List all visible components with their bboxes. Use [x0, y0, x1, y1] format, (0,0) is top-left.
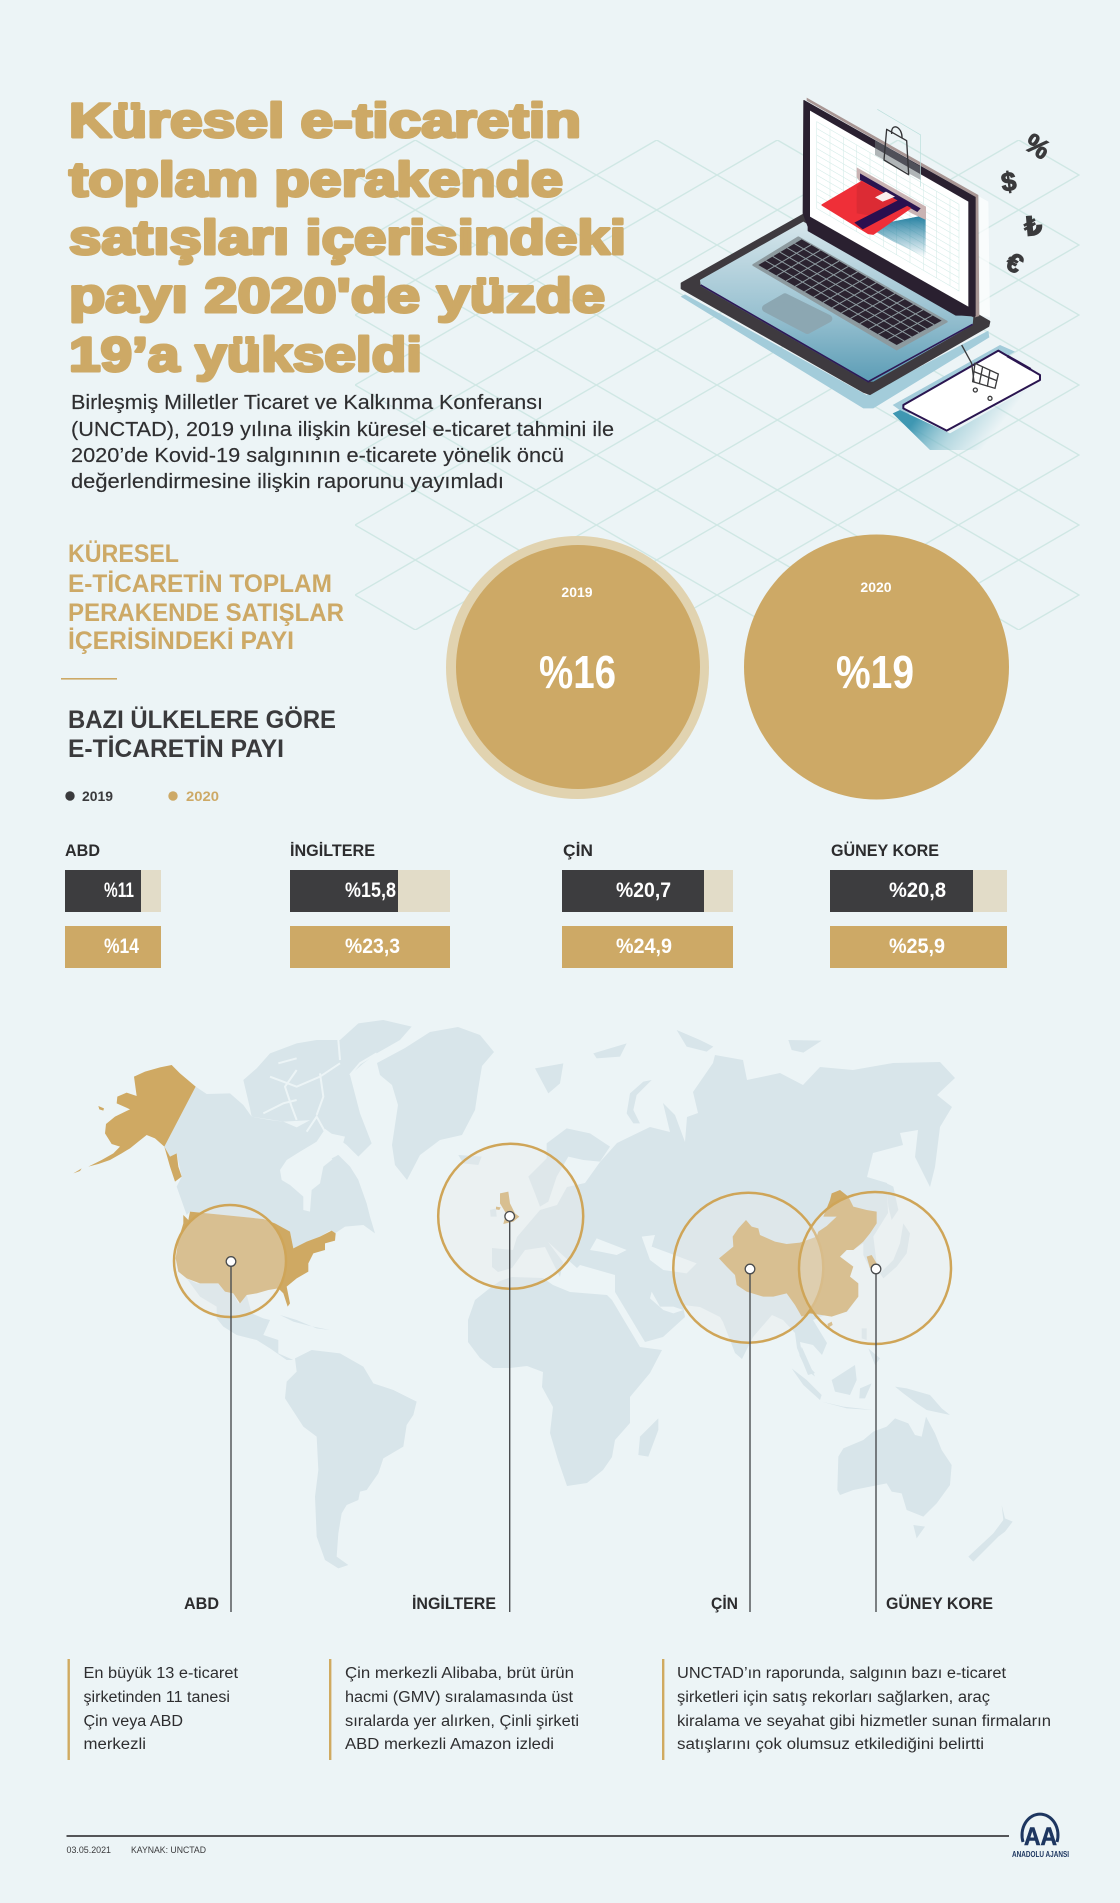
illustration: laptop and phone: $ — [999, 166, 1018, 198]
intro text: 2020’de Kovid-19 salgınının e-ticarete yönelik öncü — [71, 445, 564, 467]
text block: Alibaba: hacmi (GMV) sıralamasında üst — [345, 1689, 574, 1706]
heading: by country — [68, 705, 336, 763]
heading: global share: PERAKENDE SATIŞLAR — [68, 599, 344, 627]
marker: İngiltere: İNGİLTERE — [412, 1594, 496, 1613]
circle: 2020 share — [744, 534, 1009, 800]
intro text: değerlendirmesine ilişkin raporunu yayımladı — [71, 471, 504, 493]
footer: 03.05.2021 — [66, 1845, 111, 1856]
text block: UNCTAD report: şirketleri için satış rekorları sağlarken, araç — [677, 1689, 990, 1706]
bars: Güney Kore: %25,9 — [889, 935, 945, 958]
illustration: laptop and phone: € — [1001, 246, 1029, 280]
circle: 2019 share: 2019 — [561, 584, 593, 600]
bars: İngiltere — [290, 841, 450, 968]
heading: global share: E-TİCARETİN TOPLAM — [68, 570, 332, 598]
bars: Çin: %20,7 — [616, 879, 671, 902]
text block: UNCTAD report: kiralama ve seyahat gibi hizmetler sunan firmaların — [677, 1713, 1051, 1730]
text block: Alibaba: Çin merkezli Alibaba, brüt ürün — [345, 1665, 574, 1682]
highlighted: USA — [73, 1065, 336, 1307]
text block: UNCTAD report — [662, 1659, 1051, 1760]
title: payı 2020'de yüzde — [69, 270, 605, 323]
bars: Güney Kore: %20,8 — [889, 879, 946, 902]
marker: İngiltere — [412, 1144, 583, 1613]
illustration: laptop and phone: % — [1019, 127, 1055, 165]
heading: global share: İÇERİSİNDEKİ PAYI — [68, 627, 294, 655]
marker: ABD — [174, 1205, 286, 1613]
bars: Güney Kore: GÜNEY KORE — [831, 841, 939, 860]
text block: top 13 companies: En büyük 13 e-ticaret — [84, 1665, 239, 1682]
legend — [65, 788, 219, 804]
text block: top 13 companies — [68, 1659, 239, 1760]
text block: top 13 companies: Çin veya ABD — [84, 1713, 183, 1730]
logo: Anadolu Ajansı: ANADOLU AJANSI — [1012, 1849, 1069, 1859]
bars: ABD: %11 — [104, 879, 134, 902]
text block: UNCTAD report: UNCTAD’ın raporunda, salgının bazı e-ticaret — [677, 1665, 1007, 1682]
bars: ABD: ABD — [65, 841, 100, 860]
illustration: laptop and phone — [681, 98, 1057, 450]
bars: ABD — [65, 841, 161, 968]
text block: Alibaba — [329, 1659, 579, 1760]
footer — [66, 1835, 1009, 1856]
intro text: Birleşmiş Milletler Ticaret ve Kalkınma Konferansı — [71, 392, 543, 414]
heading: global share — [68, 539, 344, 655]
footer: KAYNAK: UNCTAD — [131, 1845, 206, 1856]
text block: UNCTAD report: satışlarını çok olumsuz etkilediğini belirtti — [677, 1736, 984, 1753]
intro text: (UNCTAD), 2019 yılına ilişkin küresel e-ticaret tahmini ile — [71, 419, 614, 441]
bars: İngiltere: %23,3 — [345, 935, 400, 958]
illustration: laptop and phone: ₺ — [1023, 211, 1044, 242]
circle: 2019 share: %16 — [539, 646, 616, 698]
text block: Alibaba: ABD merkezli Amazon izledi — [345, 1736, 554, 1753]
heading: by country: E-TİCARETİN PAYI — [68, 735, 284, 763]
text block: top 13 companies: merkezli — [84, 1736, 146, 1753]
title — [69, 95, 626, 382]
title: satışları içerisindeki — [69, 212, 626, 265]
logo: Anadolu Ajansı: AA — [1024, 1823, 1057, 1851]
bars: Güney Kore — [830, 841, 1007, 968]
world map — [73, 1020, 1013, 1568]
logo: Anadolu Ajansı — [1012, 1814, 1069, 1859]
bars: Çin: %24,9 — [616, 935, 672, 958]
highlighted: China and South Korea — [719, 1190, 877, 1327]
legend: 2020 — [186, 788, 219, 804]
text block: top 13 companies: şirketinden 11 tanesi — [84, 1689, 230, 1706]
marker: Çin: ÇİN — [711, 1594, 738, 1613]
bars: Çin — [562, 841, 733, 968]
marker: Çin — [673, 1193, 823, 1613]
bars: İngiltere: %15,8 — [345, 879, 396, 902]
text block: Alibaba: sıralarda yer alırken, Çinli şirketi — [345, 1713, 579, 1730]
marker: Güney Kore: GÜNEY KORE — [886, 1594, 993, 1613]
circle: 2019 share — [446, 536, 709, 799]
marker: ABD: ABD — [184, 1594, 219, 1613]
circle: 2020 share: %19 — [836, 646, 914, 698]
heading: global share: KÜRESEL — [68, 539, 179, 568]
title: Küresel e-ticaretin — [69, 95, 581, 148]
highlighted: UK — [496, 1192, 519, 1224]
bars: ABD: %14 — [104, 935, 139, 958]
legend: 2019 — [82, 788, 113, 804]
title: 19’a yükseldi — [69, 329, 422, 382]
bars: İngiltere: İNGİLTERE — [290, 841, 375, 860]
title: toplam perakende — [69, 154, 563, 207]
marker: Güney Kore — [799, 1192, 993, 1613]
heading: by country: BAZI ÜLKELERE GÖRE — [68, 705, 336, 734]
circle: 2020 share: 2020 — [860, 579, 892, 595]
bars: Çin: ÇİN — [563, 841, 593, 860]
intro text — [71, 392, 614, 493]
